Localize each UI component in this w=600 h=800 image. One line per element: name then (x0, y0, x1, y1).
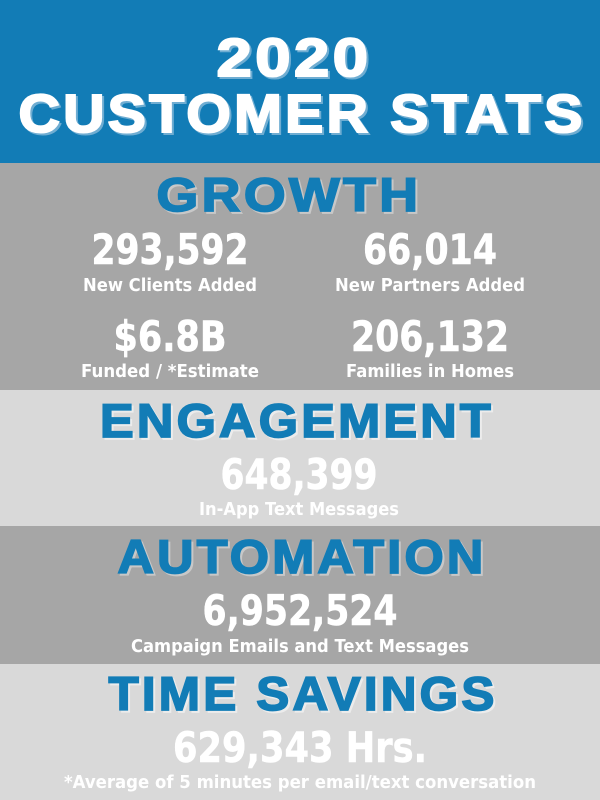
panel: automation (0, 526, 600, 664)
stat: new clients: 293,592 (92, 225, 248, 274)
stat: families (346, 312, 514, 382)
stat: in-app messages: 648,399 (220, 450, 378, 499)
heading: growth: GROWTH (156, 168, 422, 221)
stat: families: Families in Homes (346, 362, 514, 382)
title: CUSTOMER STATS (18, 84, 586, 144)
stat: funded: Funded / *Estimate (81, 362, 259, 382)
stat: new partners: 66,014 (363, 225, 497, 274)
stat: funded: $6.8B (114, 312, 226, 361)
stat: hours saved: *Average of 5 minutes per email/text conversation (64, 773, 536, 793)
stat: campaign messages: Campaign Emails and Text Messages (131, 637, 469, 657)
title (18, 28, 586, 144)
stat: new clients (83, 225, 257, 296)
panel: header (0, 0, 600, 163)
stat: new clients: New Clients Added (83, 276, 257, 296)
panel: engagement (0, 390, 600, 526)
stat: campaign messages (131, 586, 469, 657)
heading: engagement: ENGAGEMENT (100, 394, 494, 447)
title: 2020 (216, 28, 372, 88)
heading: automation: AUTOMATION (118, 530, 486, 583)
heading: time savings: TIME SAVINGS (108, 667, 497, 720)
stat: hours saved (64, 723, 536, 793)
stat: funded (81, 312, 259, 382)
stat: campaign messages: 6,952,524 (202, 586, 398, 635)
stat: in-app messages: In-App Text Messages (199, 500, 399, 520)
stat: in-app messages (199, 450, 399, 520)
stat: new partners: New Partners Added (335, 276, 525, 296)
stat: new partners (335, 225, 525, 296)
stat: hours saved: 629,343 Hrs. (173, 723, 427, 772)
panel: growth (0, 163, 600, 390)
panel: time savings (0, 664, 600, 800)
stat: families: 206,132 (351, 312, 509, 361)
